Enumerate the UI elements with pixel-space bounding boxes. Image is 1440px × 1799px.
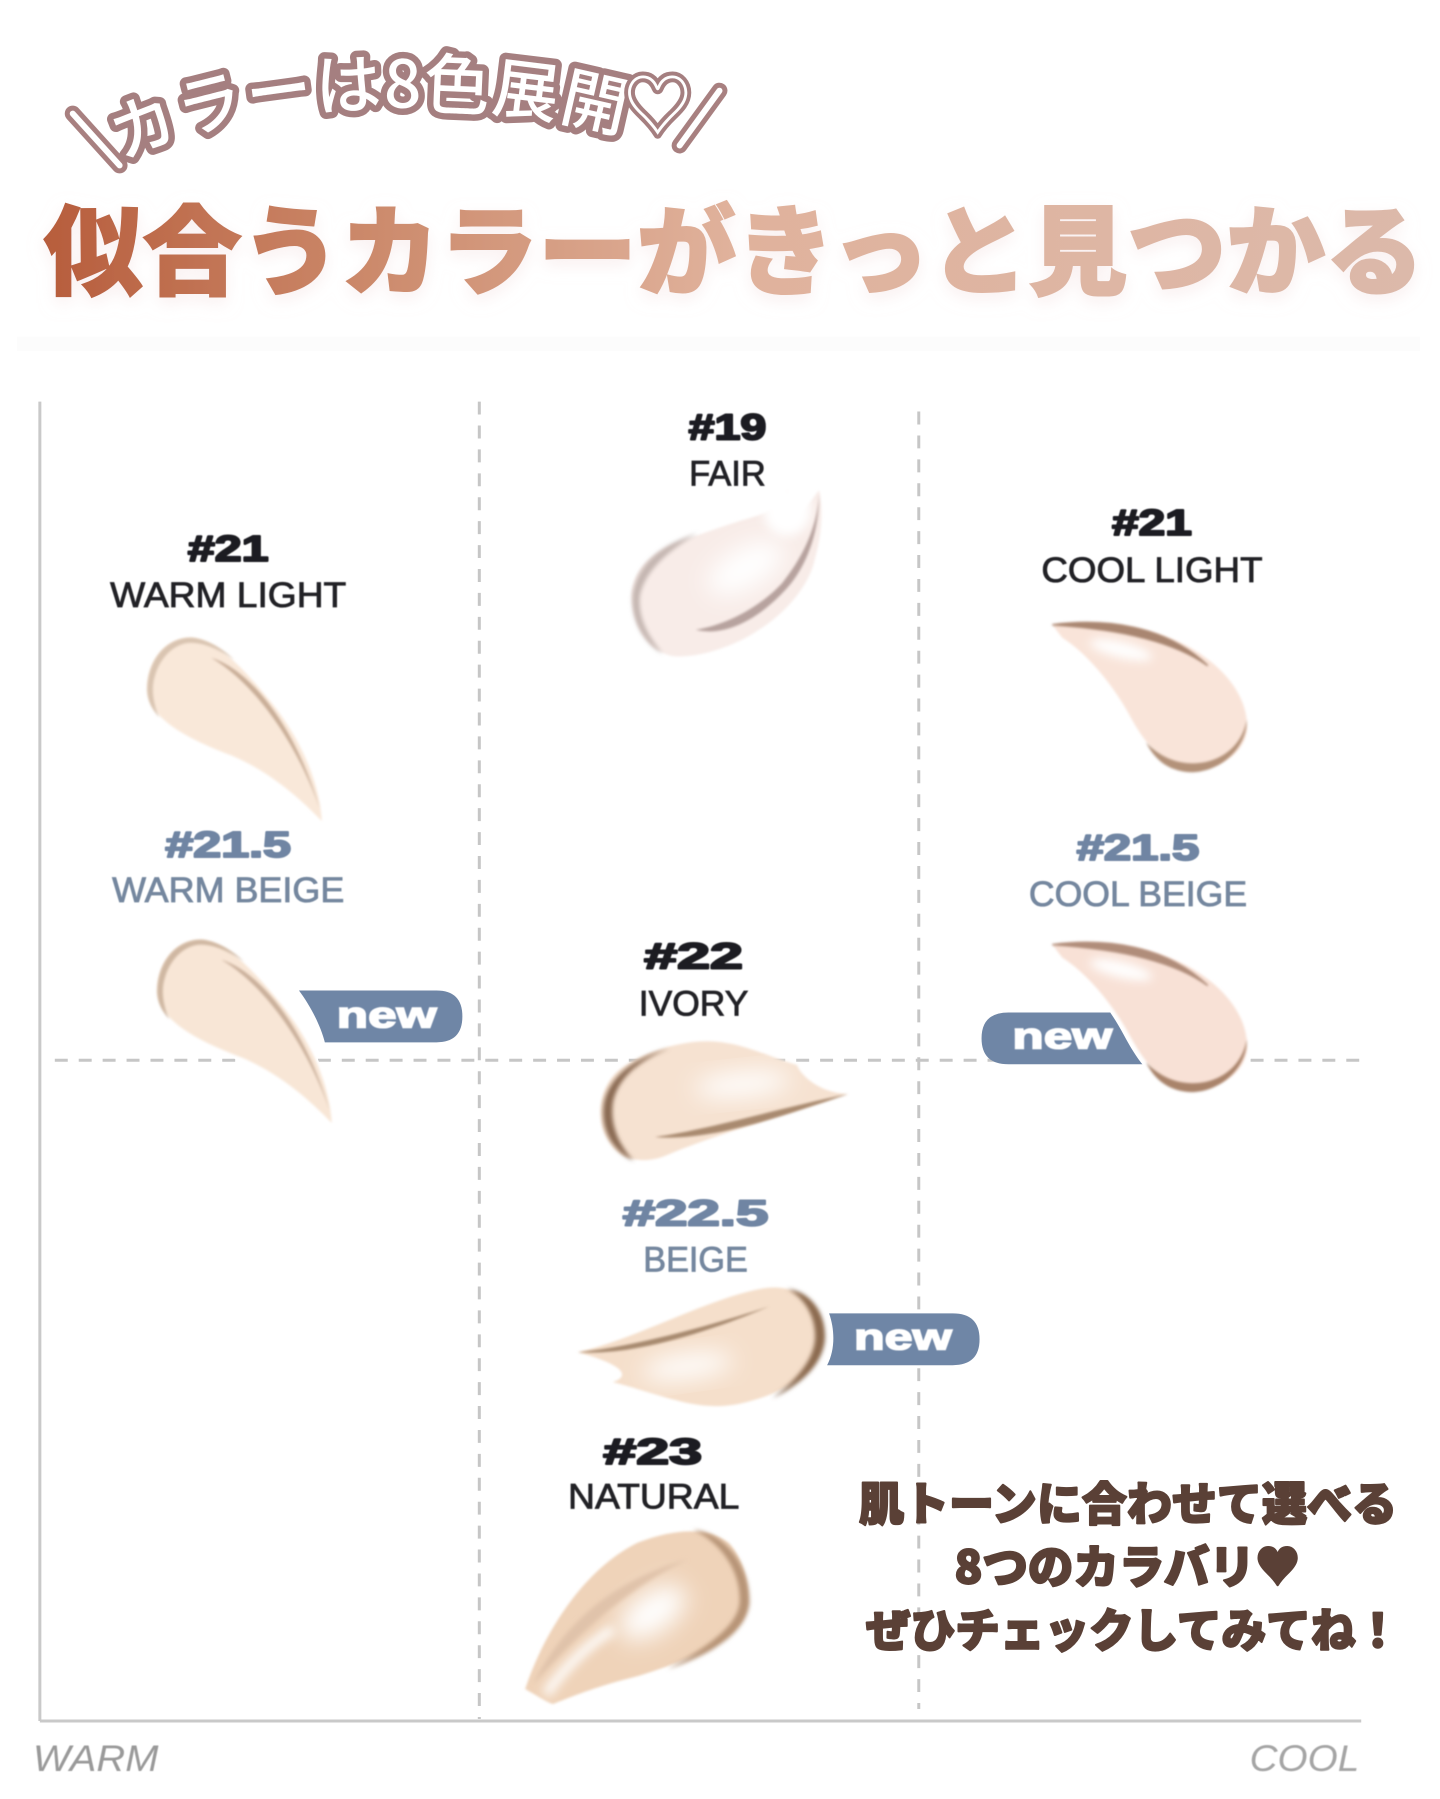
label: WARM LIGHT	[110, 576, 346, 615]
swatch	[1052, 623, 1247, 772]
pill: new, beige: new	[854, 1316, 952, 1357]
label	[689, 407, 766, 493]
callout text: ぜひチェックしてみてね！	[866, 1595, 1400, 1661]
shade: #21.5 warm beige	[112, 825, 344, 1129]
callout text	[859, 1469, 1400, 1661]
subtitle: curved heading: ♡	[623, 52, 693, 153]
label: #23	[603, 1432, 702, 1472]
shade: #19 fair	[632, 407, 821, 656]
shade: #21 cool light	[1041, 503, 1263, 772]
label: BEIGE	[643, 1241, 748, 1280]
label: #19	[689, 407, 766, 447]
swatch	[525, 1530, 749, 1704]
label: #22	[644, 937, 743, 977]
shade: #21 warm light	[110, 529, 346, 821]
label	[639, 937, 748, 1023]
shade: #23 natural	[525, 1432, 749, 1704]
swatch	[1050, 940, 1251, 1092]
pill: new, cool beige	[982, 1012, 1146, 1064]
title: 似合うカラーがきっと見つかる	[44, 175, 1424, 316]
callout text: 肌トーンに合わせて選べる	[859, 1469, 1397, 1535]
label: WARM BEIGE	[112, 871, 344, 910]
chart axes and grid	[40, 402, 1361, 1721]
label	[1041, 503, 1263, 590]
label: #21.5	[165, 825, 291, 865]
label	[1029, 828, 1247, 914]
shade: #21.5 cool beige	[1029, 828, 1251, 1092]
pill: new, cool beige: new	[1012, 1015, 1113, 1056]
label: IVORY	[639, 984, 748, 1023]
subtitle: curved heading: カラーは8色展開	[107, 46, 632, 164]
label	[568, 1432, 739, 1517]
axis label: cool: COOL	[1250, 1738, 1359, 1779]
pill: new, beige	[827, 1313, 980, 1365]
swatch	[153, 936, 334, 1129]
pill: new, warm beige: new	[337, 994, 437, 1035]
swatch	[632, 484, 821, 656]
swatch	[578, 1287, 825, 1406]
label: NATURAL	[568, 1478, 739, 1517]
label: COOL BEIGE	[1029, 875, 1247, 914]
label: #21	[1112, 503, 1192, 543]
swatch	[600, 1041, 848, 1161]
shade: #22.5 beige	[578, 1194, 825, 1406]
label	[112, 825, 344, 910]
label: COOL LIGHT	[1041, 551, 1263, 590]
pill: new, warm beige	[299, 991, 462, 1042]
shade: #22 ivory	[600, 937, 848, 1161]
label: #21.5	[1077, 828, 1199, 868]
label: #22.5	[623, 1194, 768, 1234]
callout text: 8つのカラバリ♥	[955, 1531, 1300, 1597]
label: #21	[188, 529, 269, 569]
label: FAIR	[689, 454, 766, 493]
axis label: warm: WARM	[33, 1738, 159, 1779]
swatch	[147, 638, 322, 821]
label	[623, 1194, 768, 1280]
label	[110, 529, 346, 615]
faint band under title	[17, 337, 1420, 351]
